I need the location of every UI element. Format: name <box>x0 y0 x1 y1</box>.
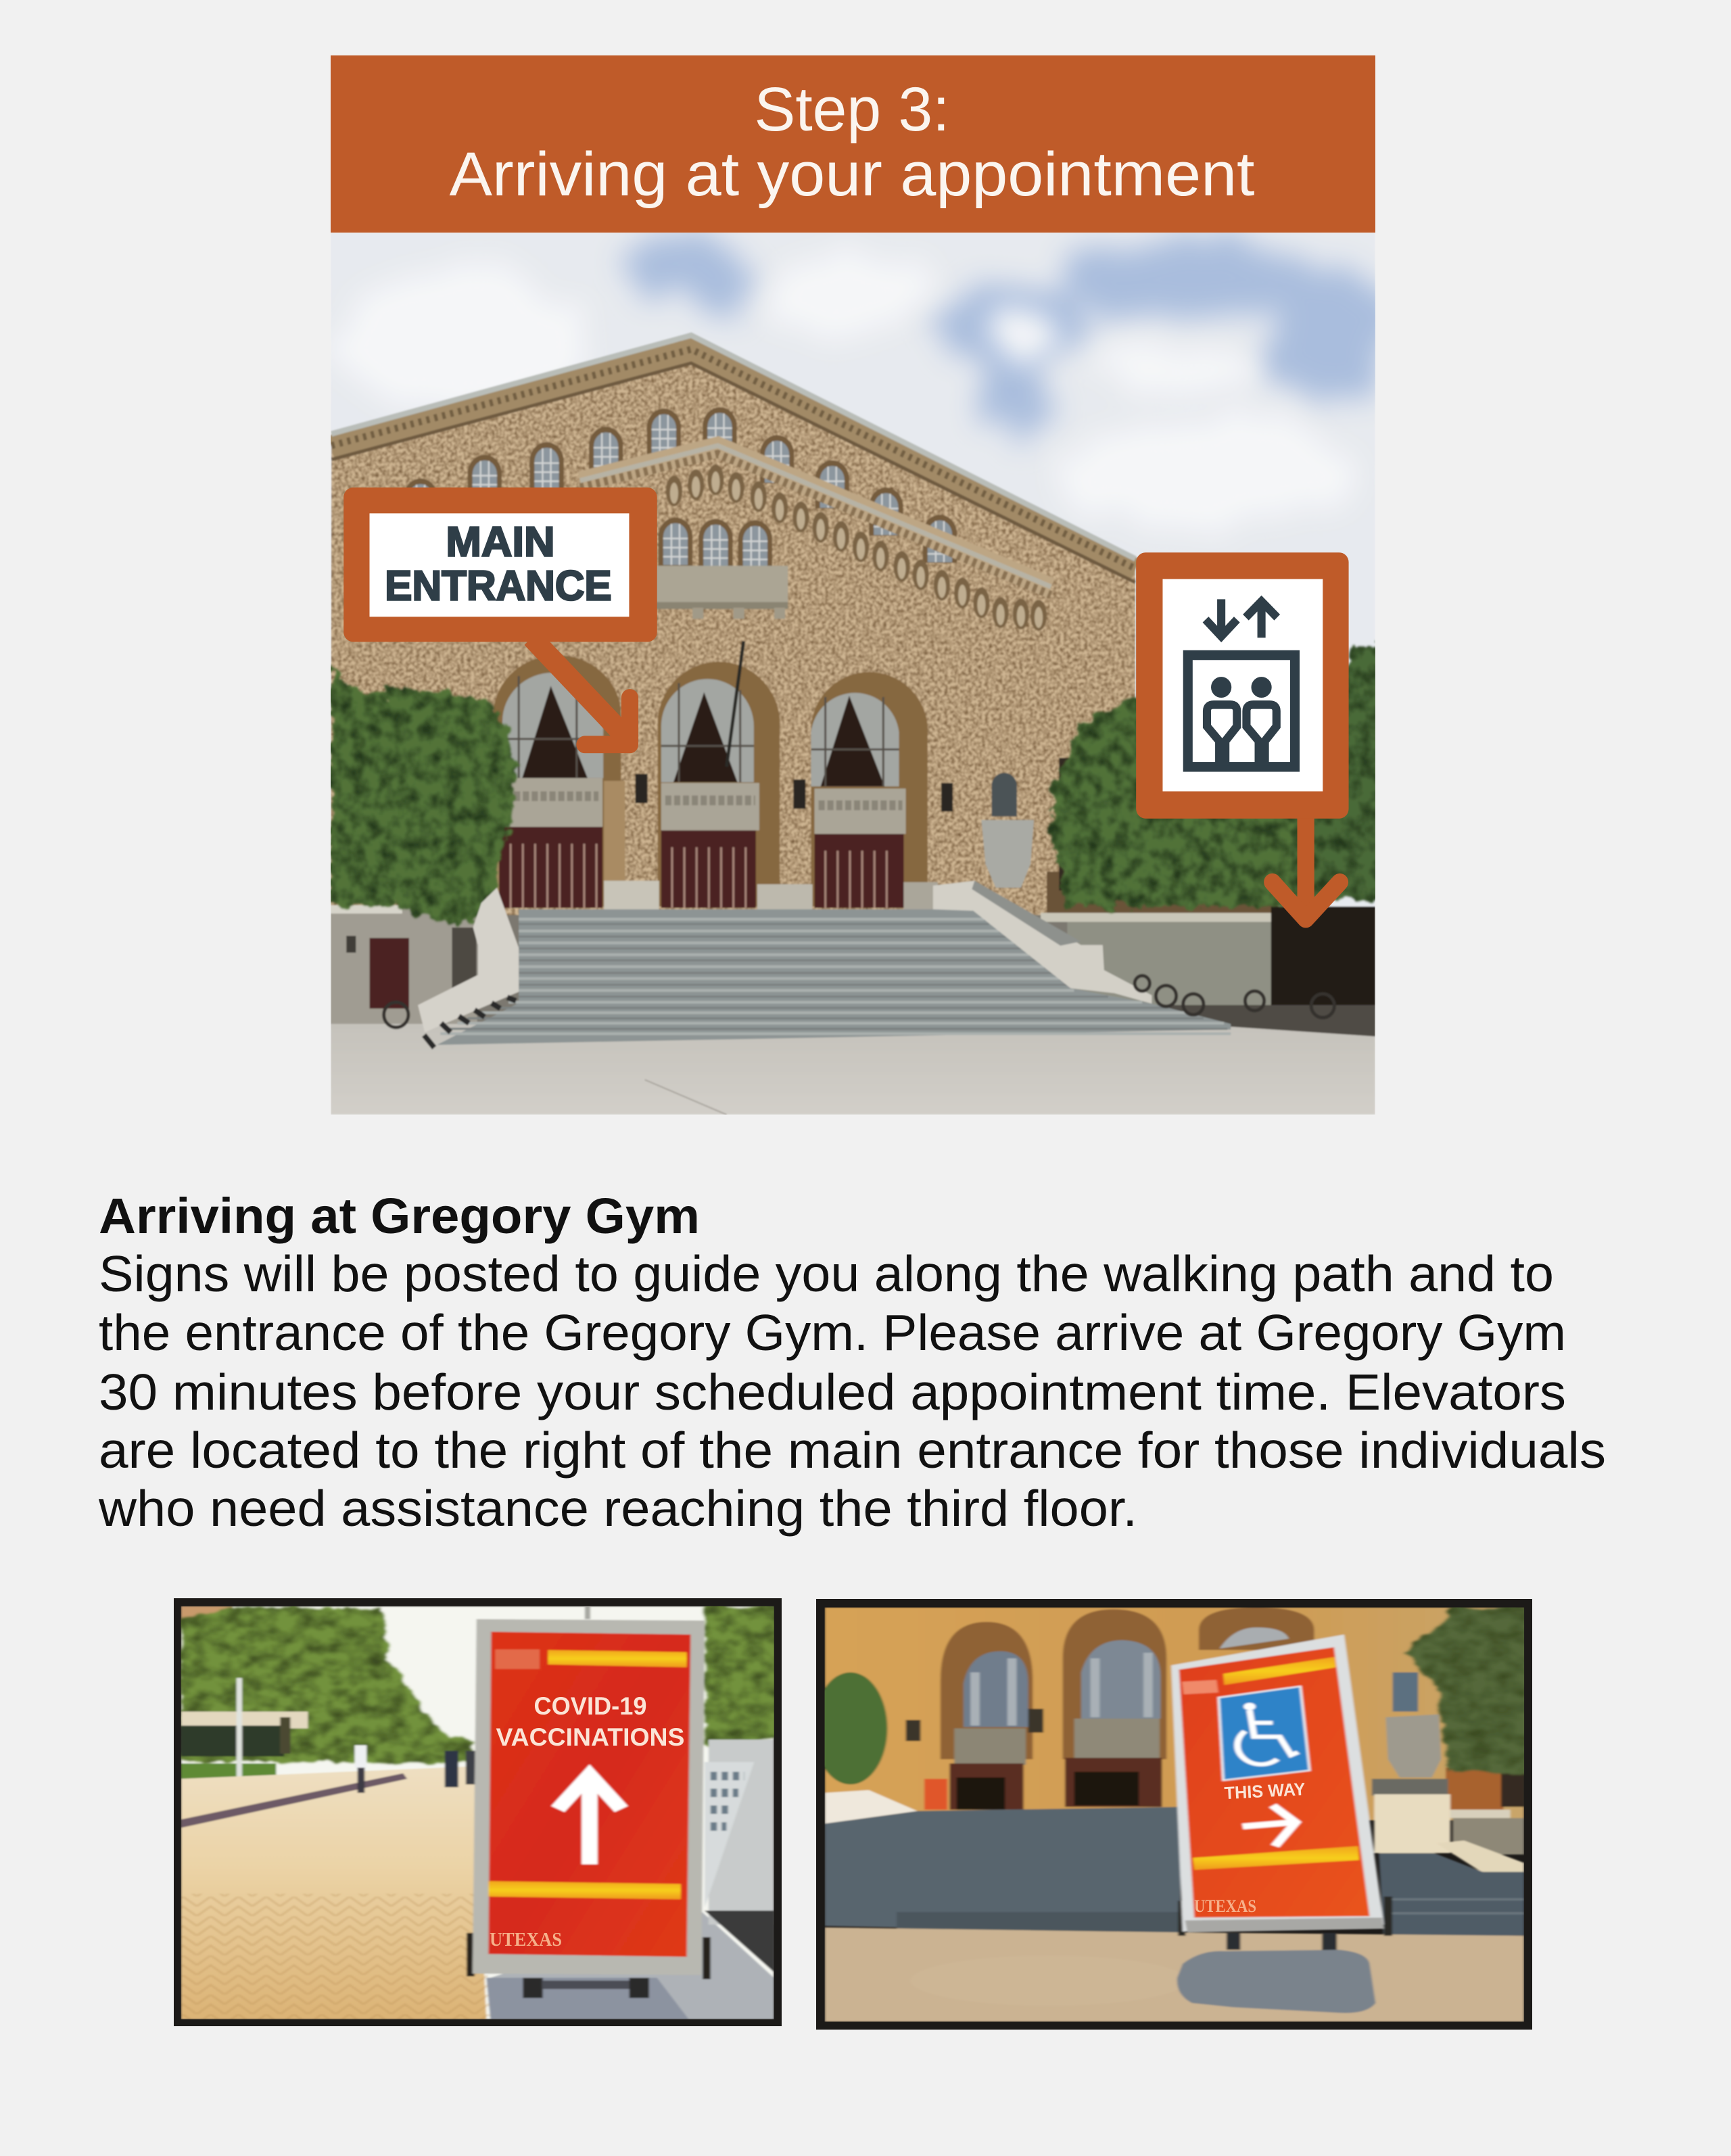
lower left building <box>331 905 477 1030</box>
photo: accessible route sign at Gregory Gym <box>813 1599 1532 2030</box>
body paragraph <box>98 1245 1606 1537</box>
title banner <box>331 55 1375 233</box>
main entrance sign <box>343 487 657 744</box>
lanterns, side window and pedestal <box>604 773 1034 910</box>
doors <box>499 827 904 908</box>
balcony bands <box>500 778 906 834</box>
section heading: Arriving at Gregory Gym <box>99 1188 700 1244</box>
sign text: THIS WAY <box>1224 1779 1306 1803</box>
roof cornice <box>331 335 1135 583</box>
elevator sign with arrow <box>1136 552 1349 919</box>
ground <box>331 1005 1375 1115</box>
right wall and dark shadow <box>1041 758 1375 1009</box>
sign text: VACCINATIONS <box>496 1723 684 1751</box>
body paragraph: are located to the right of the main entrance for those individuals <box>99 1422 1606 1479</box>
building facade <box>331 335 1135 915</box>
body paragraph: Signs will be posted to guide you along the walking path and to <box>99 1245 1554 1302</box>
title banner: Arriving at your appointment <box>449 140 1255 209</box>
small windows and balcony <box>656 518 788 619</box>
staircase <box>437 909 1231 1045</box>
sign text: COVID-19 <box>534 1692 646 1720</box>
left tree <box>331 666 519 926</box>
gable arched niches <box>666 464 1047 631</box>
sign logo: UTEXAS <box>1194 1896 1256 1916</box>
sky with clouds <box>331 233 1391 938</box>
main entrance sign: ENTRANCE <box>385 562 612 609</box>
icon: elevator <box>1188 599 1295 767</box>
photo: COVID-19 vaccinations sign on walkway <box>174 1598 782 2026</box>
body paragraph: the entrance of the Gregory Gym. Please arrive at Gregory Gym <box>99 1304 1566 1361</box>
right trees <box>1052 641 1388 907</box>
photo: Gregory Gym with wayfinding signs <box>331 233 1391 1115</box>
body paragraph: 30 minutes before your scheduled appointment time. Elevators <box>99 1364 1566 1420</box>
upper arched windows <box>404 407 957 563</box>
sign text <box>496 1692 684 1751</box>
body paragraph: who need assistance reaching the third floor. <box>98 1480 1137 1537</box>
inner gable cornice <box>580 446 1051 595</box>
main entrance sign: MAIN <box>446 519 555 565</box>
parked bikes <box>384 976 1334 1028</box>
sign logo: UTEXAS <box>490 1930 562 1950</box>
back layer behind trees and wall <box>476 908 1375 1023</box>
stair balustrades <box>418 881 1152 1048</box>
big arches <box>494 641 928 907</box>
title banner: Step 3: <box>755 75 949 144</box>
